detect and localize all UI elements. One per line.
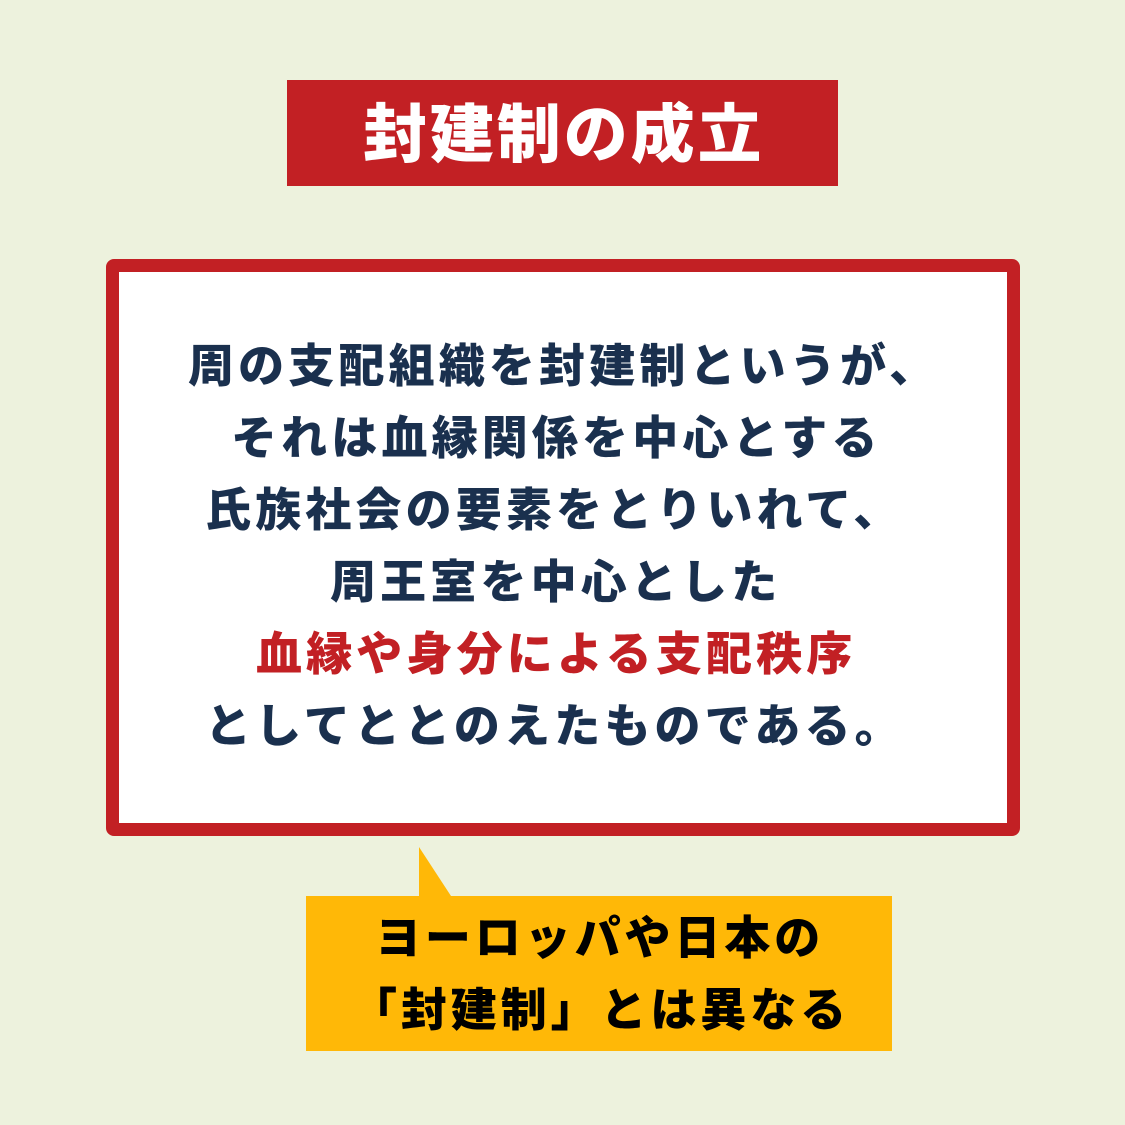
callout line 1: ヨーロッパや日本の xyxy=(375,912,824,964)
text line 4: 周王室を中心とした xyxy=(330,556,781,608)
title banner xyxy=(287,80,838,186)
callout pointer xyxy=(419,847,451,896)
text line 2: それは血縁関係を中心とする xyxy=(231,412,882,464)
callout box xyxy=(306,896,892,1051)
callout xyxy=(306,847,892,1051)
highlighted text line: 血縁や身分による支配秩序 xyxy=(256,628,856,680)
title text: 封建制の成立 xyxy=(363,99,764,171)
panel: explanation xyxy=(106,259,1020,836)
callout line 2: 「封建制」とは異なる xyxy=(351,984,850,1036)
text line 3: 氏族社会の要素をとりいれて、 xyxy=(205,484,903,536)
text line 1: 周の支配組織を封建制というが、 xyxy=(188,340,939,392)
text line 6: としてととのえたものである。 xyxy=(205,700,905,752)
